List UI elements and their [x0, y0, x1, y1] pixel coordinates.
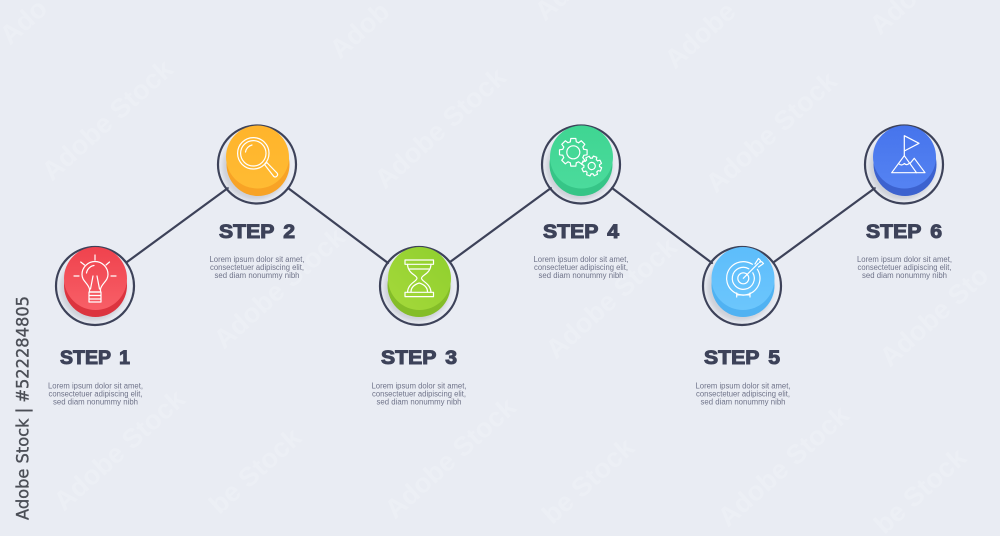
step 2 text: Lorem ipsum dolor sit amet,: [210, 255, 304, 264]
step 4 text: consectetuer adipiscing elit,: [534, 263, 628, 272]
step 6 text: Lorem ipsum dolor sit amet,: [857, 255, 952, 264]
step 3 text: [372, 382, 466, 406]
step 3 text: Lorem ipsum dolor sit amet,: [372, 382, 466, 390]
step 2 text: consectetuer adipiscing elit,: [210, 263, 304, 272]
stock watermarks: Adobe Sto: [874, 260, 994, 372]
step 4 text: sed diam nonummy nibh: [538, 271, 624, 280]
stock id side label: Adobe Stock | #522284805: [14, 296, 34, 520]
step 1 text: Lorem ipsum dolor sit amet,: [48, 382, 143, 390]
step 4 node: [542, 126, 620, 204]
stock watermarks: Adobe Stock: [208, 221, 351, 354]
stock watermarks: Adobe Stock: [36, 53, 179, 186]
step 3 text: sed diam nonummy nibh: [376, 398, 462, 406]
step 6 heading: STEP 6: [866, 222, 942, 243]
step 4 heading: STEP 4: [543, 222, 619, 243]
step 2 heading: STEP 2: [219, 222, 295, 243]
step 4 text: Lorem ipsum dolor sit amet,: [534, 255, 628, 264]
step 5 text: Lorem ipsum dolor sit amet,: [696, 382, 790, 390]
step 6 text: sed diam nonummy nibh: [862, 271, 947, 280]
step 1 text: consectetuer adipiscing elit,: [48, 390, 142, 398]
step 5 text: consectetuer adipiscing elit,: [696, 390, 790, 398]
stock watermarks: Adobe Stock: [379, 391, 522, 524]
stock watermarks: Adobe Stock: [48, 383, 191, 516]
stock watermarks: be Stock: [536, 432, 641, 530]
step 6 text: consectetuer adipiscing elit,: [858, 263, 952, 272]
step 2 node: [218, 126, 296, 204]
step 1 node: [56, 247, 134, 325]
step 6 node: [865, 126, 943, 204]
icon: target with arrow: [727, 258, 764, 297]
step 6 text: [857, 255, 952, 280]
stock watermarks: Adobe Stock: [540, 231, 683, 364]
step 2 text: sed diam nonummy nibh: [214, 271, 300, 280]
icon: mountain with flag: [892, 136, 925, 173]
step 5 node: [703, 247, 781, 325]
stock watermarks: Adobe Stock: [700, 65, 843, 198]
step 3 text: consectetuer adipiscing elit,: [372, 390, 466, 398]
connector line: [127, 188, 875, 263]
icon: magnifying glass: [238, 138, 278, 177]
step 3 heading: STEP 3: [381, 348, 457, 369]
step 5 heading: STEP 5: [704, 348, 780, 369]
step 5 text: sed diam nonummy nibh: [700, 398, 786, 406]
step 1 text: sed diam nonummy nibh: [53, 398, 138, 406]
step 3 node: [380, 247, 458, 325]
step 4 text: [534, 255, 628, 280]
step 1 heading: STEP 1: [60, 348, 130, 369]
icon: light bulb: [74, 255, 116, 302]
stock watermarks: Adobe Stock: [369, 61, 512, 194]
step 1 text: [48, 382, 143, 406]
stock watermarks: Adobe Stock: [712, 399, 855, 532]
stock watermarks: be Stock: [203, 422, 308, 520]
icon: hourglass: [405, 260, 434, 297]
step 5 text: [696, 382, 790, 406]
step 2 text: [210, 255, 304, 280]
icon: gears: [560, 138, 604, 179]
